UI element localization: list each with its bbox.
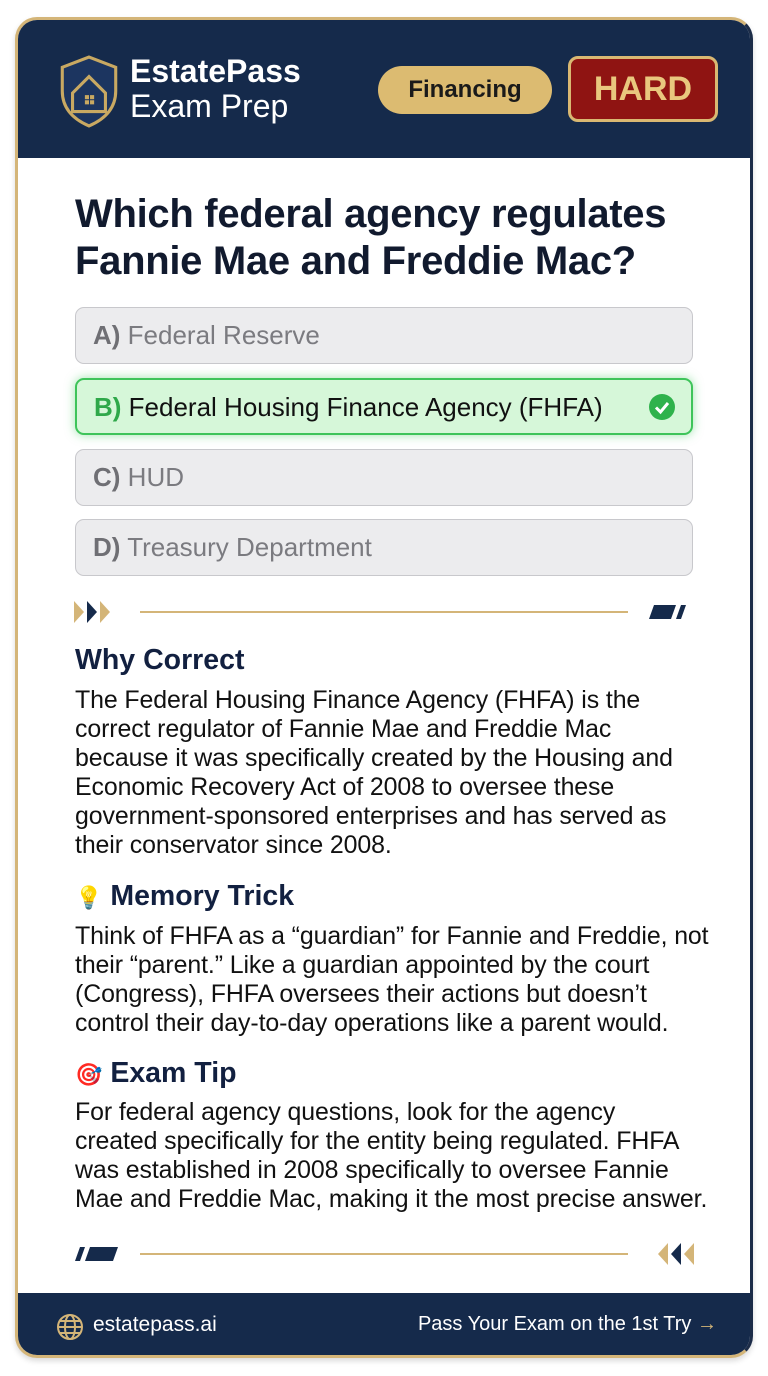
- divider bottom: [75, 1243, 694, 1265]
- globe icon: [57, 1314, 83, 1340]
- footer bar: [18, 1293, 750, 1361]
- option C: C) HUD: [93, 462, 184, 492]
- text: memory trick: Think of FHFA as a “guardian” for Fannie and Freddie, not: [75, 922, 708, 950]
- heading: exam tip: 🎯 Exam Tip: [75, 1057, 237, 1089]
- difficulty badge: HARD: [594, 70, 692, 108]
- heading: why correct: Why Correct: [75, 644, 244, 676]
- check icon: [649, 394, 675, 420]
- option B correct: [75, 378, 693, 435]
- header bar: [18, 20, 750, 158]
- text: why correct: Economic Recovery Act of 2008 to oversee these: [75, 773, 614, 801]
- text: exam tip: was established in 2008 specifically to oversee Fannie: [75, 1156, 669, 1184]
- tagline: Pass Your Exam on the 1st Try →: [418, 1313, 717, 1335]
- question: Which federal agency regulates: [75, 192, 666, 236]
- text: why correct: The Federal Housing Finance Agency (FHFA) is the: [75, 686, 640, 714]
- option D: D) Treasury Department: [93, 532, 372, 562]
- divider top: [74, 601, 686, 623]
- brand name: Exam Prep: [130, 88, 288, 124]
- question: Fannie Mae and Freddie Mac?: [75, 239, 636, 283]
- brand name: EstatePass: [130, 53, 301, 89]
- text: memory trick: their “parent.” Like a guardian appointed by the court: [75, 951, 649, 979]
- category pill: Financing: [408, 76, 522, 103]
- difficulty badge: [568, 56, 718, 122]
- text: exam tip: [75, 1098, 707, 1213]
- text: exam tip: Mae and Freddie Mac, making it the most precise answer.: [75, 1185, 707, 1213]
- option D: [75, 519, 693, 576]
- text: memory trick: control their day-to-day operations like a parent would.: [75, 1009, 668, 1037]
- text: why correct: government-sponsored enterprises and has served as: [75, 802, 666, 830]
- option C: [75, 449, 693, 506]
- text: why correct: because it was specifically created by the Housing and: [75, 744, 673, 772]
- heading: memory trick: 💡 Memory Trick: [75, 880, 294, 912]
- brand name: [130, 53, 301, 124]
- option B correct: B) Federal Housing Finance Agency (FHFA): [94, 392, 603, 422]
- website: estatepass.ai: [93, 1313, 217, 1336]
- question: [75, 192, 666, 283]
- text: memory trick: [75, 922, 708, 1037]
- option A: [75, 307, 693, 364]
- text: exam tip: For federal agency questions, look for the agency: [75, 1098, 615, 1126]
- text: why correct: [75, 686, 673, 859]
- logo shield icon: [60, 55, 118, 128]
- text: why correct: correct regulator of Fannie Mae and Freddie Mac: [75, 715, 611, 743]
- text: why correct: their conservator since 2008.: [75, 831, 392, 859]
- text: memory trick: (Congress), FHFA oversees their actions but doesn’t: [75, 980, 647, 1008]
- option A: A) Federal Reserve: [93, 320, 320, 350]
- category pill: [378, 66, 552, 114]
- text: exam tip: created specifically for the entity being regulated. FHFA: [75, 1127, 679, 1155]
